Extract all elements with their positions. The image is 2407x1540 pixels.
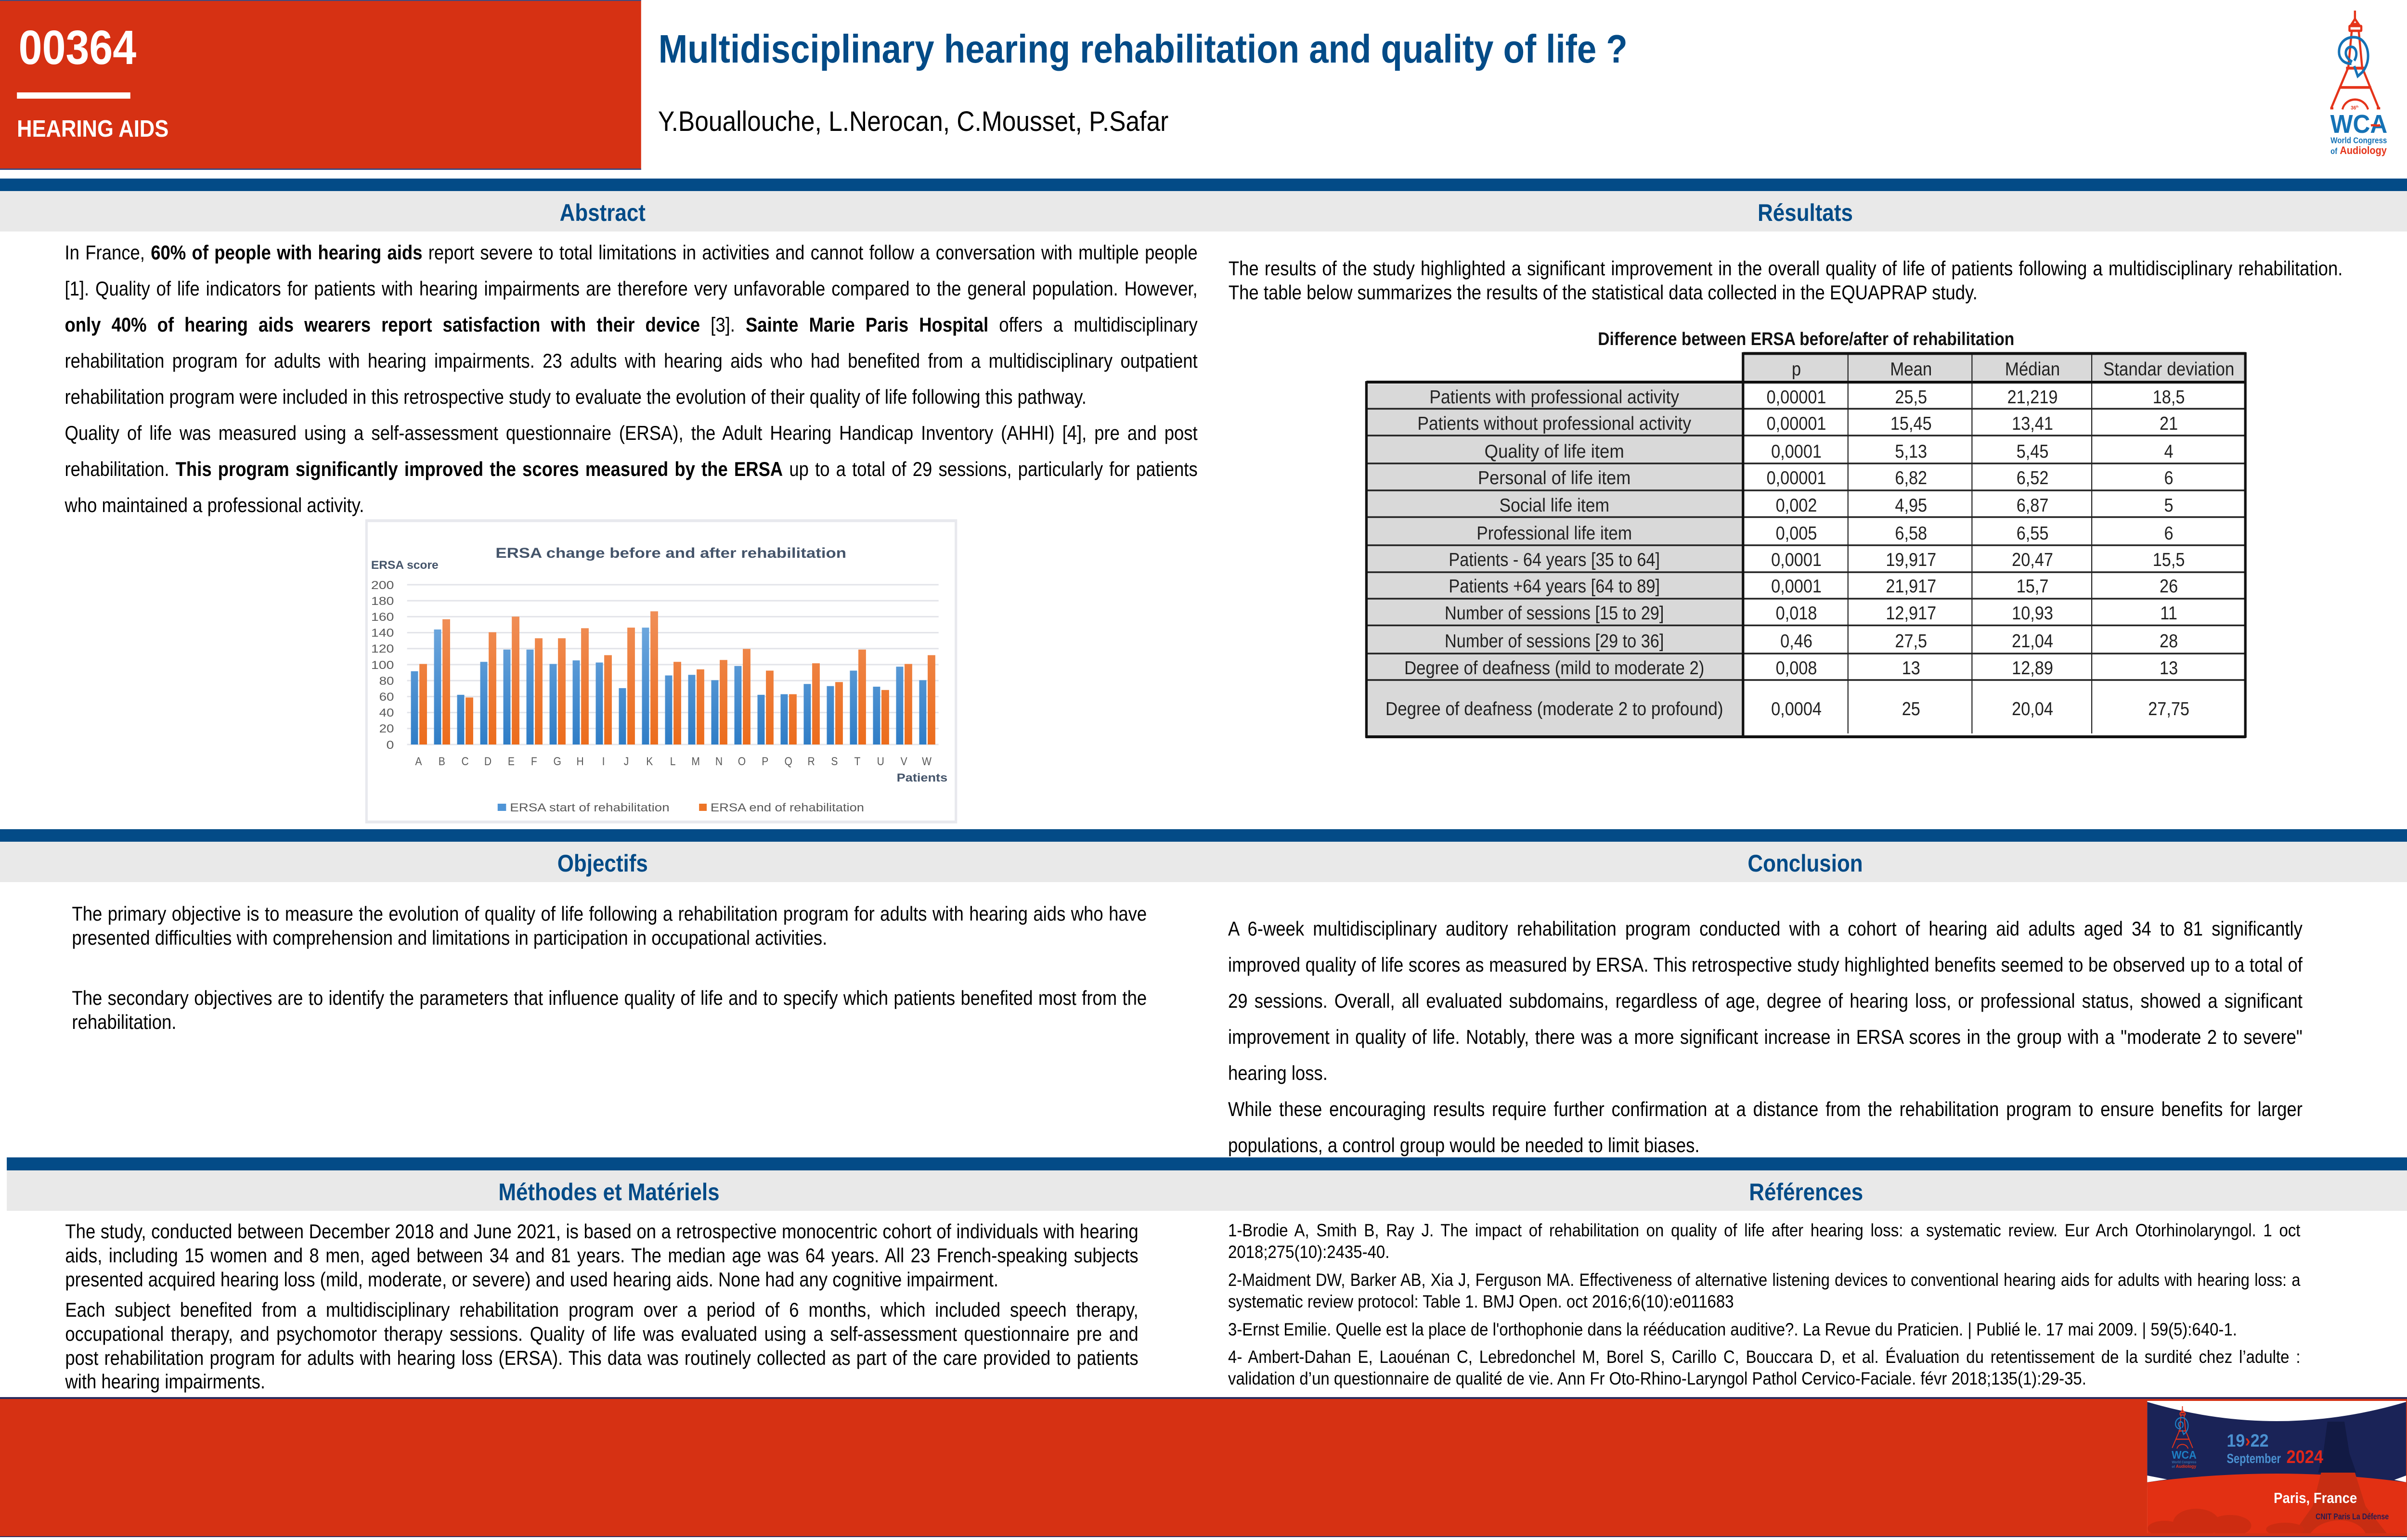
text block: methods: aids, including 15 women and 8 men, aged between 34 and 81 years. The median age was 64 years. All 23 French-speaking subjects: [65, 1244, 1139, 1267]
bar chart: ERSA change before and after rehabilitation: A: [415, 755, 422, 768]
text block: abstract: rehabilitation program were included in this retrospective study to evaluate the evolution of their quality of life following this pathway.: [65, 385, 1087, 408]
bar chart: ERSA change before and after rehabilitation: M: [691, 755, 700, 768]
bar chart: ERSA change before and after rehabilitation: F: [531, 755, 537, 768]
text block: methods: [65, 1220, 1139, 1393]
results table: difference between ERSA before/after rehabilitation: 15,45: [1890, 413, 1932, 434]
results table: difference between ERSA before/after rehabilitation: Professional life item: [1476, 523, 1632, 543]
heading: Références: Références: [1749, 1179, 1863, 1206]
results table: difference between ERSA before/after rehabilitation: 6: [2164, 523, 2174, 543]
results table: difference between ERSA before/after rehabilitation: 28: [2160, 630, 2178, 651]
bar chart: ERSA change before and after rehabilitation: G: [554, 755, 561, 768]
bar chart: ERSA change before and after rehabilitation: K: [646, 755, 653, 768]
bar chart: ERSA change before and after rehabilitation: V: [901, 755, 907, 768]
text block: abstract: who maintained a professional activity.: [65, 494, 364, 516]
bar chart: ERSA change before and after rehabilitation: 0: [387, 739, 394, 751]
results table: difference between ERSA before/after rehabilitation: 0,00001: [1767, 413, 1826, 434]
results table: difference between ERSA before/after rehabilitation: 0,46: [1780, 630, 1812, 651]
results table: difference between ERSA before/after rehabilitation: 4,95: [1895, 495, 1927, 515]
text block: references: 1-Brodie A, Smith B, Ray J. The impact of rehabilitation on quality of life after hearing loss: a systematic review. Eur Arch Otorhinolaryngol. 1 oct: [1228, 1220, 2300, 1240]
icon: WCA logo: Audiology: [2340, 145, 2387, 156]
footer banner: congress dates and location: World Congress: [2172, 1461, 2196, 1464]
results table: difference between ERSA before/after rehabilitation: 0,002: [1776, 495, 1817, 515]
footer banner: congress dates and location: CNIT Paris La Défense: [2316, 1512, 2389, 1521]
results table: difference between ERSA before/after rehabilitation: 0,0001: [1771, 576, 1822, 596]
results table: difference between ERSA before/after rehabilitation: 6,87: [2017, 495, 2048, 515]
bar chart: ERSA change before and after rehabilitation: ERSA start of rehabilitation: [510, 801, 670, 814]
text block: abstract: In France, 60% of people with hearing aids report severe to total limitations in activities and cannot follow a conversation with multiple people: [65, 241, 1198, 264]
results table: difference between ERSA before/after rehabilitation: 6: [2164, 467, 2174, 488]
bar chart: ERSA change before and after rehabilitation: 120: [371, 642, 394, 655]
results table: difference between ERSA before/after rehabilitation: 6,82: [1895, 467, 1927, 488]
results table: difference between ERSA before/after rehabilitation: Social life item: [1499, 495, 1609, 515]
results table: difference between ERSA before/after rehabilitation: Patients with professional activity: [1429, 386, 1680, 407]
footer band: [0, 1397, 2407, 1537]
text block: conclusion: improvement in quality of life. Notably, there was a more significant increase in ERSA scores in the group with a "moderate 2 to severe": [1228, 1025, 2303, 1048]
text block: abstract: only 40% of hearing aids wearers report satisfaction with their device [3]. Sainte Marie Paris Hospital offers a multidisciplinary: [65, 313, 1198, 336]
footer banner: congress dates and location: [2147, 1401, 2406, 1533]
bar chart: ERSA change before and after rehabilitation: ERSA end of rehabilitation: [711, 801, 864, 814]
results table: difference between ERSA before/after rehabilitation: 21,917: [1886, 576, 1936, 596]
bar chart: ERSA change before and after rehabilitation: N: [715, 755, 723, 768]
text block: conclusion: [1228, 917, 2303, 1156]
text block: objectives: rehabilitation.: [72, 1011, 176, 1033]
heading: Abstract: Abstract: [560, 199, 646, 226]
results table: difference between ERSA before/after rehabilitation: 5,13: [1895, 441, 1927, 462]
results table: difference between ERSA before/after rehabilitation: Quality of life item: [1485, 441, 1624, 462]
results table: difference between ERSA before/after rehabilitation: 15,5: [2153, 549, 2185, 570]
topic label: HEARING AIDS: [17, 116, 168, 142]
icon: WCA logo: of: [2330, 147, 2338, 156]
bar chart: ERSA change before and after rehabilitation: 160: [371, 611, 394, 623]
results table: difference between ERSA before/after rehabilitation: 21: [2160, 413, 2178, 434]
results table: difference between ERSA before/after rehabilitation: Standar deviation: [2103, 359, 2234, 379]
results table: difference between ERSA before/after rehabilitation: 25: [1902, 698, 1920, 719]
bar chart: ERSA change before and after rehabilitation: U: [877, 755, 884, 768]
text block: methods: post rehabilitation program for adults with hearing loss (ERSA). This data was routinely collected as part of the care provided to patients: [65, 1347, 1139, 1369]
results table: difference between ERSA before/after rehabilitation: 0,008: [1776, 657, 1817, 678]
icon: WCA logo: World Congress: [2330, 136, 2387, 145]
text block: methods: with hearing impairments.: [65, 1370, 265, 1393]
results table: difference between ERSA before/after rehabilitation: 0,00001: [1767, 386, 1826, 407]
icon: WCA logo: 36: [2351, 105, 2356, 111]
results table: difference between ERSA before/after rehabilitation: 20,47: [2012, 549, 2053, 570]
bar chart: ERSA change before and after rehabilitation: 100: [371, 659, 394, 671]
results table: difference between ERSA before/after rehabilitation: 11: [2160, 603, 2177, 623]
bar chart: ERSA change before and after rehabilitation: ERSA change before and after rehabilitation: [495, 544, 846, 561]
bar chart: ERSA change before and after rehabilitation: 180: [371, 595, 394, 607]
bar chart: ERSA change before and after rehabilitation: R: [808, 755, 815, 768]
results table: difference between ERSA before/after rehabilitation: 6,52: [2017, 467, 2048, 488]
white accent bar: [17, 92, 130, 99]
bar chart: ERSA change before and after rehabilitation: ERSA score: [371, 559, 439, 571]
footer banner: congress dates and location: 19›22: [2227, 1431, 2269, 1450]
bar chart: ERSA change before and after rehabilitation: D: [484, 755, 492, 768]
bar chart: ERSA change before and after rehabilitation: B: [439, 755, 445, 768]
results table: difference between ERSA before/after rehabilitation: 12,917: [1886, 603, 1936, 623]
bar chart: ERSA change before and after rehabilitation: 80: [379, 675, 394, 687]
bar chart: ERSA change before and after rehabilitation: 20: [379, 722, 394, 735]
poster title: Multidisciplinary hearing rehabilitation and quality of life ?: [659, 26, 1628, 71]
results table: difference between ERSA before/after rehabilitation: Mean: [1890, 359, 1932, 379]
text block: methods: occupational therapy, and psychomotor therapy sessions. Quality of life was evaluated using a self-assessment questionnaire pre and: [65, 1322, 1139, 1345]
results table: difference between ERSA before/after rehabilitation: 27,75: [2148, 698, 2189, 719]
text block: abstract: rehabilitation. This program significantly improved the scores measured by the ERSA up to a total of 29 sessions, particularly for patients: [65, 457, 1198, 480]
results table: difference between ERSA before/after rehabilitation: 0,0004: [1771, 698, 1822, 719]
icon: WCA logo: WCA: [2330, 110, 2387, 139]
results table: difference between ERSA before/after rehabilitation: Degree of deafness (moderate 2 to profound): [1385, 698, 1723, 719]
results table: difference between ERSA before/after rehabilitation: 10,93: [2012, 603, 2053, 623]
results table: difference between ERSA before/after rehabilitation: 19,917: [1886, 549, 1936, 570]
bar chart: ERSA change before and after rehabilitation: T: [854, 755, 861, 768]
bar chart: ERSA change before and after rehabilitation: 200: [371, 579, 394, 591]
bar chart: ERSA change before and after rehabilitation: C: [461, 755, 469, 768]
results table: difference between ERSA before/after rehabilitation: 15,7: [2017, 576, 2048, 596]
results table: difference between ERSA before/after rehabilitation: 21,04: [2012, 630, 2053, 651]
results table: difference between ERSA before/after rehabilitation: 0,005: [1776, 523, 1817, 543]
bar chart: ERSA change before and after rehabilitation: W: [922, 755, 932, 768]
text block: objectives: [72, 902, 1147, 1033]
results table: difference between ERSA before/after rehabilitation: 12,89: [2012, 657, 2053, 678]
results table: difference between ERSA before/after rehabilitation: 27,5: [1895, 630, 1927, 651]
bar chart: ERSA change before and after rehabilitation: H: [577, 755, 584, 768]
text block: results introduction: The table below summarizes the results of the statistical data collected in the EQUAPRAP study.: [1229, 281, 1978, 303]
text block: conclusion: populations, a control group would be needed to limit biases.: [1228, 1134, 1700, 1156]
results table: difference between ERSA before/after rehabilitation: 20,04: [2012, 698, 2053, 719]
text block: abstract: Quality of life was measured using a self-assessment questionnaire (ERSA), the Adult Hearing Handicap Inventory (AHHI) [4], pre and post: [65, 422, 1198, 444]
results table: difference between ERSA before/after rehabilitation: Médian: [2005, 359, 2060, 379]
bar chart: ERSA change before and after rehabilitation: P: [762, 755, 768, 768]
bar chart: ERSA change before and after rehabilitation: Q: [784, 755, 792, 768]
text block: abstract: [65, 241, 1198, 516]
text block: references: 3-Ernst Emilie. Quelle est la place de l'orthophonie dans la rééducation auditive?. La Revue du Praticien. | Publié le. 17 mai 2009. | 59(5):640-1.: [1228, 1319, 2237, 1339]
footer banner: congress dates and location: 2024: [2286, 1447, 2323, 1467]
bar chart: ERSA change before and after rehabilitation: S: [831, 755, 838, 768]
footer banner: congress dates and location: September: [2227, 1451, 2281, 1466]
results table: difference between ERSA before/after rehabilitation: [1365, 329, 2247, 738]
text block: references: validation d’un questionnaire de qualité de vie. Ann Fr Oto-Rhino-Laryngol Pathol Cervico-Faciale. févr 2018;135(1):29-35.: [1228, 1368, 2086, 1388]
bar chart: ERSA change before and after rehabilitation: 40: [379, 706, 394, 719]
results table: difference between ERSA before/after rehabilitation: 13: [1902, 657, 1920, 678]
bar chart: ERSA change before and after rehabilitation: 60: [379, 691, 394, 703]
results table: difference between ERSA before/after rehabilitation: 0,018: [1776, 603, 1817, 623]
bar chart: ERSA change before and after rehabilitation: J: [624, 755, 629, 768]
bar chart: ERSA change before and after rehabilitation: 140: [371, 627, 394, 639]
authors: Y.Bouallouche, L.Nerocan, C.Mousset, P.Safar: [658, 106, 1168, 137]
text block: abstract: [1]. Quality of life indicators for patients with hearing impairments are therefore very unfavorable compared to the general population. However,: [65, 277, 1198, 299]
bar chart: ERSA change before and after rehabilitation: O: [738, 755, 746, 768]
footer banner: congress dates and location: Paris, France: [2274, 1490, 2357, 1506]
results table: difference between ERSA before/after rehabilitation: 26: [2160, 576, 2178, 596]
results table: difference between ERSA before/after rehabilitation: 13: [2160, 657, 2178, 678]
icon: WCA logo: [2330, 11, 2387, 156]
results table: difference between ERSA before/after rehabilitation: Number of sessions [29 to 36]: [1445, 630, 1664, 651]
heading: Résultats: Résultats: [1758, 199, 1853, 226]
footer banner: congress dates and location: of: [2172, 1465, 2175, 1469]
results table: difference between ERSA before/after rehabilitation: 6,58: [1895, 523, 1927, 543]
results table: difference between ERSA before/after rehabilitation: 25,5: [1895, 386, 1927, 407]
text block: conclusion: improved quality of life scores as measured by ERSA. This retrospective study highlighted benefits seemed to be observed up to a total of: [1228, 953, 2303, 976]
results table: difference between ERSA before/after rehabilitation: 0,0001: [1771, 441, 1822, 462]
heading: Objectifs: Objectifs: [557, 850, 648, 877]
text block: abstract: rehabilitation program for adults with hearing impairments. 23 adults with hearing aids who had benefited from a multidisciplinary outpatient: [65, 349, 1198, 372]
text block: methods: Each subject benefited from a multidisciplinary rehabilitation program over a period of 6 months, which included speech therapy,: [65, 1298, 1139, 1321]
heading: Conclusion: Conclusion: [1747, 850, 1863, 877]
results table: difference between ERSA before/after rehabilitation: 21,219: [2007, 386, 2058, 407]
text block: references: 2-Maidment DW, Barker AB, Xia J, Ferguson MA. Effectiveness of alternative listening devices to conventional hearing aids for adults with hearing loss: a: [1228, 1270, 2300, 1290]
text block: methods: The study, conducted between December 2018 and June 2021, is based on a retrospective monocentric cohort of individuals with hearing: [65, 1220, 1139, 1243]
text block: references: 2018;275(10):2435-40.: [1228, 1242, 1389, 1262]
results table: difference between ERSA before/after rehabilitation: Patients without professional activity: [1417, 413, 1692, 434]
text block: objectives: The primary objective is to measure the evolution of quality of life following a rehabilitation program for adults with hearing aids who have: [72, 902, 1147, 925]
bar chart: ERSA change before and after rehabilitation: Patients: [897, 771, 947, 784]
icon: WCA logo: th: [2356, 105, 2359, 109]
text block: results introduction: [1229, 257, 2342, 303]
results table: difference between ERSA before/after rehabilitation: 0,0001: [1771, 549, 1822, 570]
text block: methods: presented acquired hearing loss (mild, moderate, or severe) and used hearing aids. None had any cognitive impairment.: [65, 1268, 998, 1291]
text block: references: systematic review protocol: Table 1. BMJ Open. oct 2016;6(10):e011683: [1228, 1291, 1734, 1311]
text block: conclusion: hearing loss.: [1228, 1062, 1328, 1084]
abstract number: 00364: [19, 21, 136, 75]
heading: Méthodes et Matériels: Méthodes et Matériels: [498, 1179, 720, 1206]
bar chart: ERSA change before and after rehabilitation: L: [670, 755, 676, 768]
results table: difference between ERSA before/after rehabilitation: Personal of life item: [1478, 467, 1631, 488]
results table: difference between ERSA before/after rehabilitation: 13,41: [2012, 413, 2053, 434]
text block: results introduction: The results of the study highlighted a significant improvement in the overall quality of life of patients following a multidisciplinary rehabilitation.: [1229, 257, 2342, 279]
results table: difference between ERSA before/after rehabilitation: Patients +64 years [64 to 89]: [1449, 576, 1660, 596]
text block: objectives: presented difficulties with comprehension and limitations in participation in occupational activities.: [72, 926, 827, 949]
results table: difference between ERSA before/after rehabilitation: 5,45: [2017, 441, 2048, 462]
results table: difference between ERSA before/after rehabilitation: 4: [2164, 441, 2174, 462]
footer banner: congress dates and location: WCA: [2172, 1449, 2197, 1461]
results table: difference between ERSA before/after rehabilitation: 5: [2164, 495, 2174, 515]
results table: difference between ERSA before/after rehabilitation: 0,00001: [1767, 467, 1826, 488]
results table: difference between ERSA before/after rehabilitation: 18,5: [2153, 386, 2185, 407]
bar chart: ERSA change before and after rehabilitation: E: [508, 755, 515, 768]
results table: difference between ERSA before/after rehabilitation: Patients - 64 years [35 to 64]: [1449, 549, 1660, 570]
header panel: abstract number and topic: [0, 0, 641, 170]
bar chart: ERSA change before and after rehabilitation: I: [602, 755, 605, 768]
results table: difference between ERSA before/after rehabilitation: p: [1792, 359, 1801, 379]
results table: difference between ERSA before/after rehabilitation: 6,55: [2017, 523, 2048, 543]
text block: objectives: The secondary objectives are to identify the parameters that influence quality of life and to specify which patients benefited most from the: [72, 987, 1147, 1009]
footer banner: congress dates and location: Audiology: [2176, 1463, 2196, 1469]
results table: difference between ERSA before/after rehabilitation: Degree of deafness (mild to moderate 2): [1404, 657, 1704, 678]
bar chart: ERSA change before and after rehabilitation: [365, 519, 957, 823]
text block: conclusion: 29 sessions. Overall, all evaluated subdomains, regardless of age, degree of hearing loss, or professional status, showed a significant: [1228, 989, 2303, 1012]
text block: references: [1228, 1220, 2300, 1388]
results table: difference between ERSA before/after rehabilitation: Difference between ERSA before/after of rehabilitation: [1598, 329, 2014, 349]
text block: conclusion: A 6-week multidisciplinary auditory rehabilitation program conducted with a cohort of hearing aid adults aged 34 to 81 significantly: [1228, 917, 2303, 939]
text block: conclusion: While these encouraging results require further confirmation at a distance from the rehabilitation program to ensure benefits for larger: [1228, 1097, 2303, 1120]
results table: difference between ERSA before/after rehabilitation: Number of sessions [15 to 29]: [1445, 603, 1664, 623]
text block: references: 4- Ambert-Dahan E, Laouénan C, Lebredonchel M, Borel S, Carillo C, Bouccara D, et al. Évaluation du retentissement de la surdité chez l’adulte :: [1228, 1347, 2300, 1367]
